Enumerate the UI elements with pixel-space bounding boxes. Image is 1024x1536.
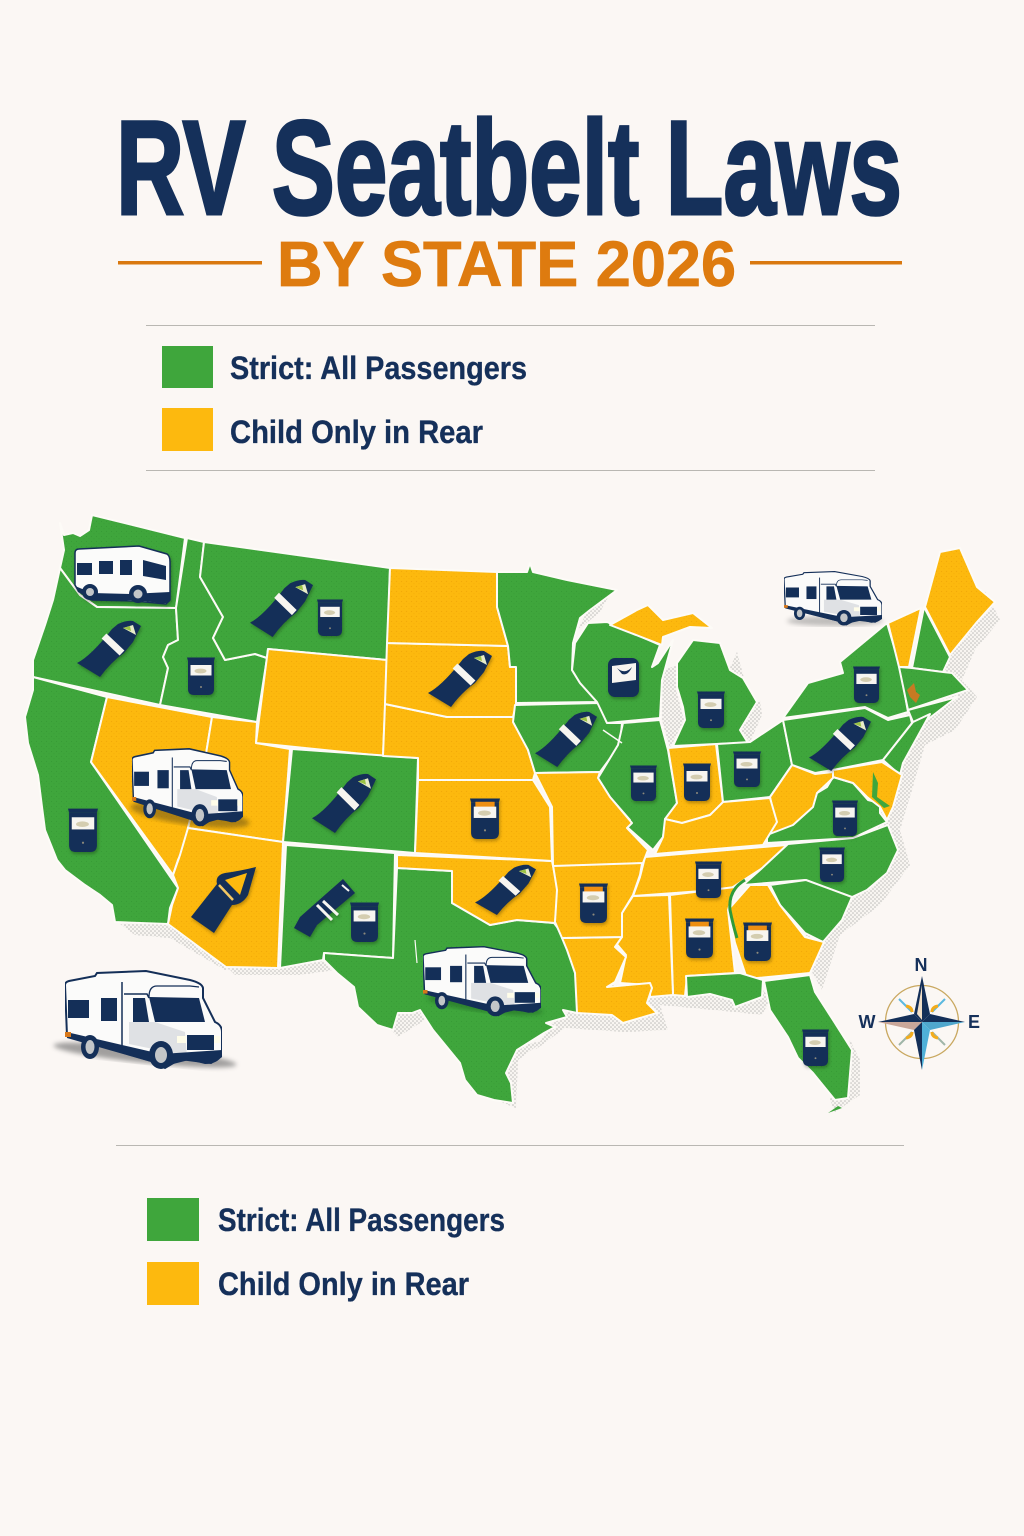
state: Long Island	[908, 697, 957, 722]
subtitle with rules	[118, 228, 902, 300]
state: Arkansas	[553, 858, 643, 938]
state: Arizona	[168, 828, 283, 968]
icon: belt Arizona	[191, 867, 256, 933]
icon: belt Iowa	[535, 712, 597, 767]
icon: pocket Kansas	[470, 799, 500, 839]
icon: pocket California	[68, 809, 98, 852]
icon: pocket New Mexico	[350, 903, 379, 942]
icon: belt New Mexico	[294, 879, 355, 937]
state: Virginia	[767, 777, 887, 843]
state: Massachusetts and Connecticut	[899, 667, 968, 710]
state: Michigan upper peninsula	[610, 605, 712, 645]
icon: pocket New York	[853, 666, 880, 703]
state: Florida panhandle	[686, 973, 763, 1007]
state: Michigan lower peninsula	[673, 640, 757, 746]
icon: pocket North Carolina	[819, 847, 845, 882]
state: Georgia	[728, 885, 824, 979]
state: Wisconsin	[572, 622, 673, 723]
state: Montana	[200, 542, 390, 660]
icon: belt South Dakota	[428, 651, 492, 707]
state: Iowa	[513, 703, 622, 773]
compass rose: W	[858, 1012, 876, 1032]
icon: pocket Tennessee	[695, 861, 722, 898]
icon: pocket Virginia	[832, 800, 858, 836]
icon: pocket Indiana	[683, 764, 711, 801]
state: South Dakota	[385, 643, 516, 717]
Chesapeake Bay	[872, 772, 890, 808]
state: Mississippi	[615, 895, 673, 997]
state: New Hampshire	[912, 607, 950, 672]
coastline halftone shadow	[120, 590, 1000, 1112]
Massachusetts rust mark	[907, 683, 920, 703]
state: Missouri	[535, 772, 648, 866]
RV shadow: Nevada	[129, 797, 251, 833]
state: New Jersey and Delaware	[883, 714, 930, 775]
state: Louisiana	[562, 937, 657, 1023]
compass rose: E	[968, 1012, 980, 1032]
state: Ohio	[717, 720, 792, 802]
state: New York	[783, 623, 908, 718]
state: Idaho	[160, 538, 267, 722]
icon: pocket Alabama	[685, 919, 714, 958]
icon: belt Colorado	[312, 774, 376, 833]
icon: belt Montana	[250, 580, 313, 637]
state: Oklahoma	[397, 855, 558, 925]
state: North Carolina	[743, 825, 898, 898]
icon: pocket Idaho	[187, 658, 215, 695]
icon: pocket Montana	[317, 599, 343, 636]
top legend	[146, 325, 875, 471]
state: Vermont	[888, 608, 921, 667]
state: Tennessee	[633, 845, 787, 896]
RV: Washington bus	[75, 546, 170, 604]
icon: pocket Florida	[802, 1029, 829, 1066]
subtitle with rules: BY STATE 2026	[277, 228, 736, 300]
icon: pocket Michigan	[697, 691, 725, 728]
Texas inner tick	[415, 940, 417, 963]
state: North Dakota	[387, 568, 508, 646]
state: Texas	[324, 868, 577, 1103]
icon: pocket Illinois	[630, 765, 657, 801]
state: Nebraska	[383, 704, 535, 780]
state: West Virginia	[767, 765, 833, 835]
state: Utah	[188, 717, 290, 842]
RV: Great Lakes	[784, 572, 882, 625]
icon: belt Oklahoma	[475, 865, 536, 915]
map of US states	[25, 515, 995, 1103]
state: Nevada	[91, 697, 212, 875]
Florida Keys	[828, 1106, 842, 1113]
RV shadow: bottom left	[53, 1037, 237, 1073]
state: Washington	[60, 515, 185, 608]
seatbelt icons	[68, 580, 880, 1066]
state: Florida	[764, 975, 852, 1100]
icon: pocket Georgia	[743, 923, 772, 961]
Iowa inner border	[603, 730, 622, 743]
state: South Carolina	[770, 880, 852, 942]
state: New Mexico	[280, 845, 395, 968]
icon: pocket Arkansas	[579, 884, 608, 923]
icon: belt Oregon	[77, 621, 141, 677]
top legend: Child Only in Rear	[230, 414, 483, 450]
compass rose: N	[914, 955, 928, 975]
state: Maine	[925, 548, 995, 655]
state: Oregon	[33, 568, 178, 705]
icon: belt Pennsylvania	[809, 717, 871, 771]
state: Kentucky	[655, 798, 777, 854]
RV: Nevada Utah	[132, 749, 243, 826]
state: Pennsylvania	[783, 708, 912, 773]
RV: bottom left large	[65, 971, 222, 1069]
state: Indiana	[665, 744, 723, 823]
bottom legend	[116, 1145, 904, 1305]
state: Maryland	[833, 762, 902, 820]
bottom legend: Child Only in Rear	[218, 1266, 469, 1302]
RV shadow: Northeast	[787, 616, 883, 626]
Georgia border strip	[730, 880, 745, 938]
state: Alabama	[670, 887, 735, 996]
top legend: Strict: All Passengers	[230, 350, 527, 386]
RV shadow: Texas	[427, 991, 543, 1019]
state: Colorado	[283, 749, 418, 853]
state: Kansas	[415, 780, 552, 861]
state: Illinois	[598, 720, 677, 850]
state: California	[25, 677, 178, 924]
state: Minnesota	[497, 563, 617, 703]
state: Wyoming	[256, 649, 387, 756]
RV: Texas	[423, 947, 541, 1016]
icon: pocket Wisconsin	[608, 658, 639, 697]
compass rose	[858, 955, 980, 1070]
icon: pocket Ohio	[733, 751, 761, 787]
bottom legend: Strict: All Passengers	[218, 1202, 505, 1238]
